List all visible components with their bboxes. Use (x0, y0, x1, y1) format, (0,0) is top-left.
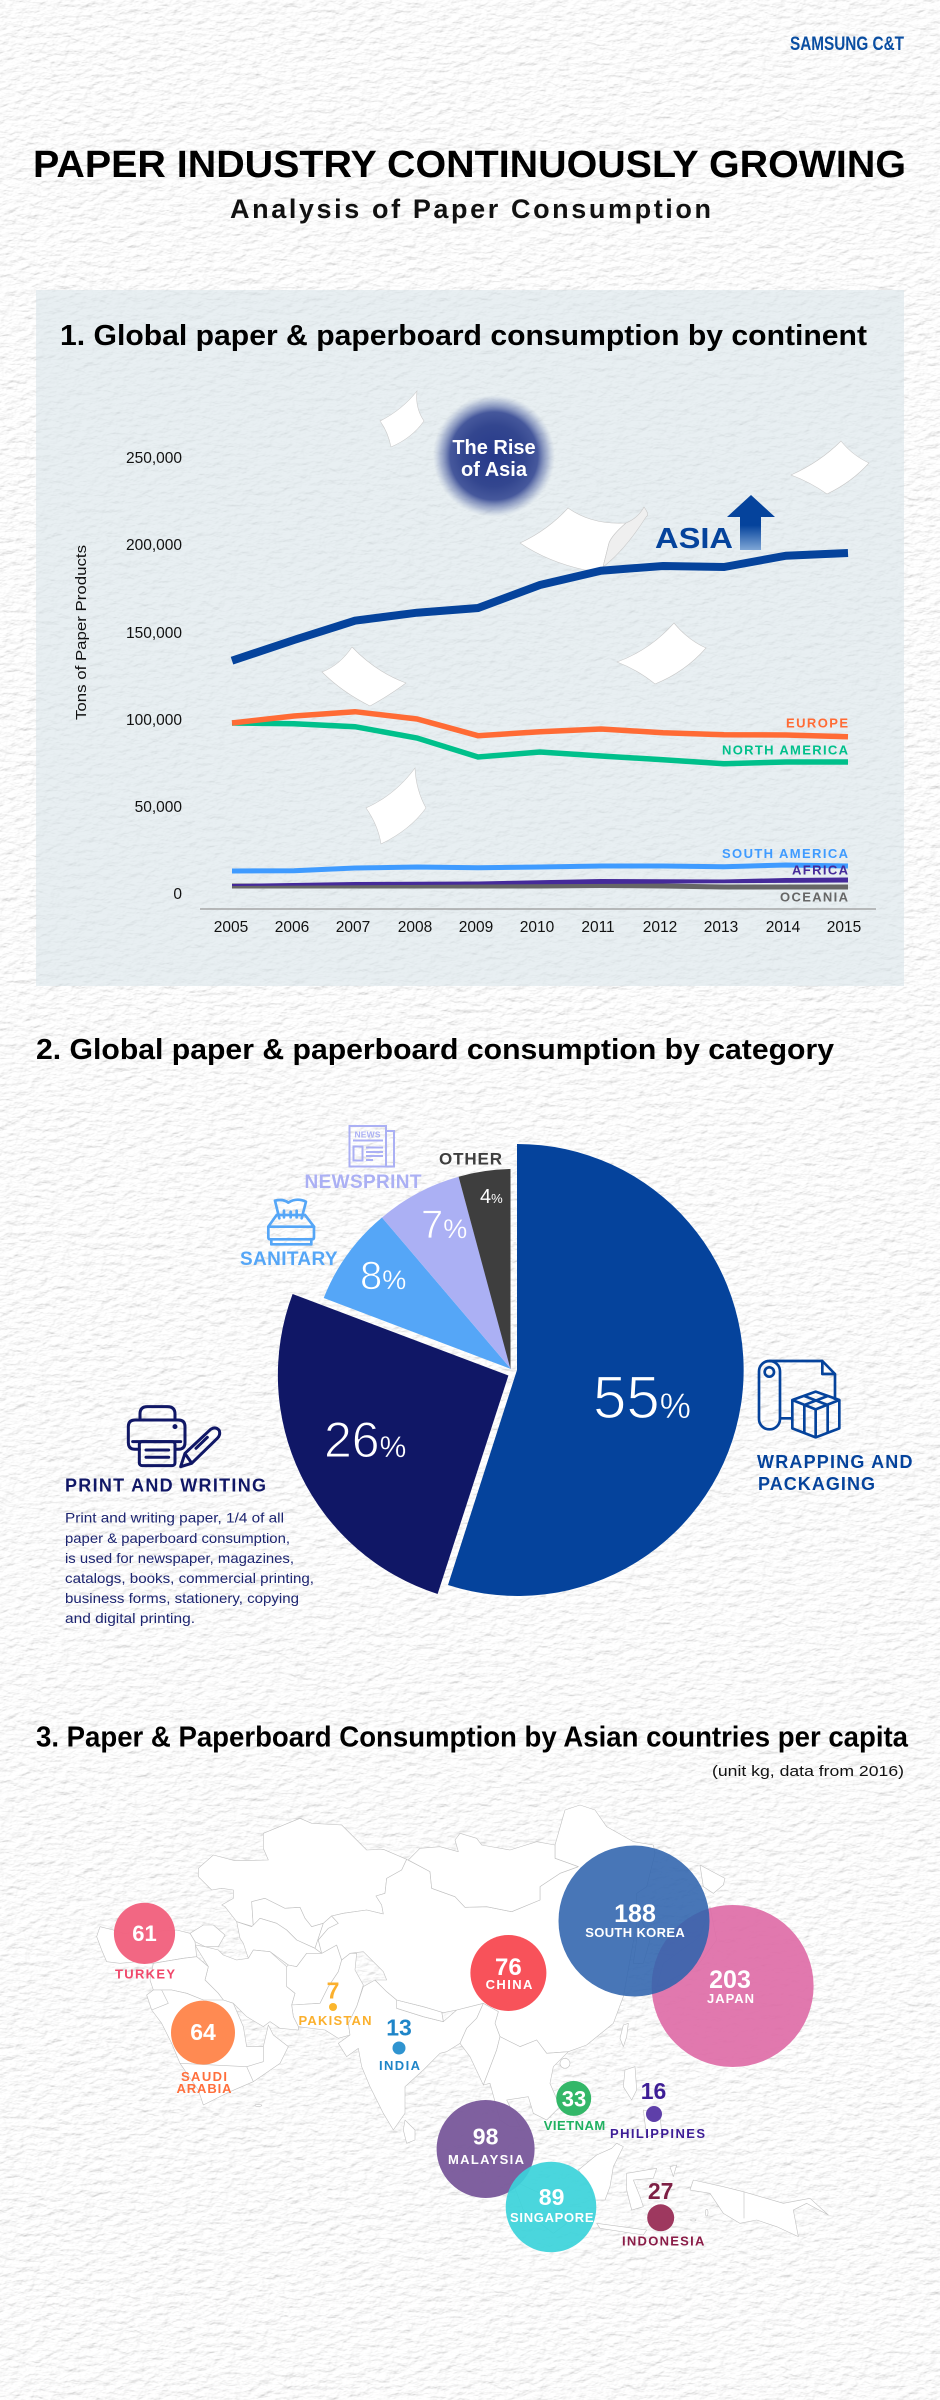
bubble: Pakistan: PAKISTAN (298, 2013, 372, 2028)
heading: section 2: 2. Global paper & paperboard consumption by category (36, 1034, 834, 1066)
series labels (722, 716, 849, 905)
label: print and writing: PRINT AND WRITING (65, 1475, 266, 1495)
bubble: South Korea: 188 (614, 1900, 656, 1928)
line: Oceania (232, 886, 848, 887)
x axis line (200, 908, 876, 910)
y axis labels (126, 450, 182, 903)
bubble: Singapore: 89 (539, 2184, 564, 2210)
x axis labels: 2009 (459, 919, 493, 936)
icon: paper roll and boxes (759, 1361, 839, 1437)
y axis labels: 0 (173, 886, 182, 903)
x axis labels: 2008 (398, 919, 432, 936)
decorative paper sheets (322, 391, 869, 844)
x axis labels (214, 919, 861, 936)
bubble: India (379, 2015, 421, 2073)
x axis labels: 2005 (214, 919, 248, 936)
bubble: Japan (652, 1905, 814, 2067)
bubble: India: INDIA (379, 2058, 421, 2073)
icon: tissue box (268, 1200, 314, 1244)
text block: print and writing description: Print and writing paper, 1/4 of all (65, 1509, 284, 1525)
map: Asia (97, 1805, 828, 2237)
slice: other 4% (459, 1169, 510, 1369)
label: wrapping and packaging: PACKAGING (758, 1474, 875, 1494)
text block: print and writing description: catalogs, books, commercial printing, (65, 1570, 314, 1586)
line: Africa (232, 878, 848, 886)
bubble: Indonesia: 27 (648, 2178, 673, 2204)
x axis labels: 2006 (275, 919, 309, 936)
y axis labels: 150,000 (126, 625, 182, 642)
bubble: Malaysia: 98 (473, 2124, 499, 2150)
text block: print and writing description (65, 1509, 314, 1626)
pie chart: consumption by category (278, 1144, 744, 1596)
series labels: OCEANIA (780, 890, 849, 905)
bubble: Malaysia: MALAYSIA (448, 2152, 525, 2167)
bubble: China: CHINA (486, 1977, 533, 1992)
text block: print and writing description: is used for newspaper, magazines, (65, 1550, 294, 1566)
bubble: Vietnam (544, 2081, 605, 2133)
callout: The Rise of Asia (433, 395, 555, 517)
bubble: Saudi Arabia: ARABIA (176, 2081, 232, 2096)
line: South America (232, 865, 848, 871)
bubble: Vietnam: 33 (562, 2086, 586, 2111)
icon: printer and pencil (128, 1407, 220, 1467)
bubble: South Korea: SOUTH KOREA (585, 1925, 685, 1940)
bubble: China (470, 1935, 546, 2011)
value: 7%: 7% (421, 1203, 467, 1247)
label: newsprint: NEWSPRINT (304, 1172, 422, 1193)
label: Asia with arrow: ASIA (655, 523, 733, 555)
label: sanitary: SANITARY (240, 1249, 338, 1270)
bubble: Turkey: 61 (132, 1921, 157, 1946)
label: Asia with arrow (655, 495, 775, 555)
bubble: Pakistan (298, 1978, 372, 2028)
series labels: AFRICA (792, 863, 849, 878)
y axis labels: 100,000 (126, 712, 182, 729)
bubble: India: 13 (386, 2015, 412, 2041)
line: North America (232, 723, 848, 764)
bubble: Philippines: 16 (641, 2078, 666, 2104)
panel: consumption by continent (36, 290, 904, 986)
bubble: Singapore (506, 2162, 596, 2252)
bubble: Vietnam: VIETNAM (544, 2118, 605, 2133)
text block: print and writing description: business forms, stationery, copying (65, 1590, 299, 1606)
heading: section 3: 3. Paper & Paperboard Consumption by Asian countries per capita (36, 1722, 909, 1754)
value: 4%: 4% (480, 1186, 503, 1208)
value: 26%: 26% (324, 1412, 406, 1468)
unit note: (unit kg, data from 2016) (712, 1763, 904, 1780)
bubble: Indonesia: INDONESIA (622, 2234, 705, 2249)
subtitle: Analysis of Paper Consumption (230, 194, 711, 224)
value: 8%: 8% (360, 1254, 406, 1298)
slice: wrapping and packaging 55% (448, 1144, 744, 1596)
y axis labels: 50,000 (135, 799, 182, 816)
bubble: Indonesia (622, 2178, 705, 2249)
x axis labels: 2013 (704, 919, 738, 936)
y axis labels: 250,000 (126, 450, 182, 467)
bubble: China: 76 (495, 1954, 522, 1981)
line: Europe (232, 712, 848, 737)
bubble: Japan: 203 (709, 1966, 751, 1994)
series labels: EUROPE (786, 716, 848, 731)
slice: sanitary 8% (324, 1218, 511, 1369)
label: wrapping and packaging: WRAPPING AND (757, 1452, 912, 1472)
callout: The Rise of Asia: of Asia (461, 459, 528, 481)
x axis labels: 2007 (336, 919, 370, 936)
x axis labels: 2014 (766, 919, 801, 936)
bubble: Pakistan: 7 (327, 1978, 339, 2004)
series labels: NORTH AMERICA (722, 743, 849, 758)
line: Asia (232, 553, 848, 661)
heading: section 1: 1. Global paper & paperboard consumption by continent (60, 320, 867, 352)
bubble: Saudi Arabia: SAUDI (181, 2069, 227, 2084)
bubble: Malaysia (437, 2100, 535, 2198)
x axis labels: 2015 (827, 919, 861, 936)
label: other: OTHER (439, 1150, 502, 1168)
slice: print and writing 26% (278, 1294, 508, 1594)
title: PAPER INDUSTRY CONTINUOUSLY GROWING (33, 144, 906, 186)
series labels: SOUTH AMERICA (722, 846, 849, 861)
bubble: Saudi Arabia (171, 2001, 235, 2096)
bubble: Turkey: TURKEY (115, 1967, 175, 1982)
text block: print and writing description: and digital printing. (65, 1610, 195, 1626)
y axis title: Tons of Paper Products (73, 545, 90, 720)
bubble: Singapore: SINGAPORE (510, 2210, 594, 2225)
icon: newspaper: NEWS (354, 1130, 381, 1140)
bubble: Philippines (610, 2078, 705, 2141)
x axis labels: 2012 (643, 919, 677, 936)
x axis labels: 2011 (581, 919, 615, 936)
logo: Samsung C&T: SAMSUNG C&T (790, 34, 904, 55)
text block: print and writing description: paper & paperboard consumption, (65, 1530, 290, 1546)
bubble: Philippines: PHILIPPINES (610, 2126, 705, 2141)
bubble: Japan: JAPAN (707, 1991, 754, 2006)
callout: The Rise of Asia: The Rise (452, 437, 536, 459)
x axis labels: 2010 (520, 919, 555, 936)
label: wrapping and packaging (757, 1452, 912, 1494)
icon: newspaper (350, 1126, 394, 1166)
y axis labels: 200,000 (126, 537, 182, 554)
bubble: Turkey (114, 1903, 175, 1982)
slice: newsprint 7% (382, 1177, 511, 1369)
value: 55%: 55% (593, 1364, 691, 1431)
bubble: Saudi Arabia: 64 (190, 2019, 216, 2045)
bubble: South Korea (558, 1846, 710, 1996)
